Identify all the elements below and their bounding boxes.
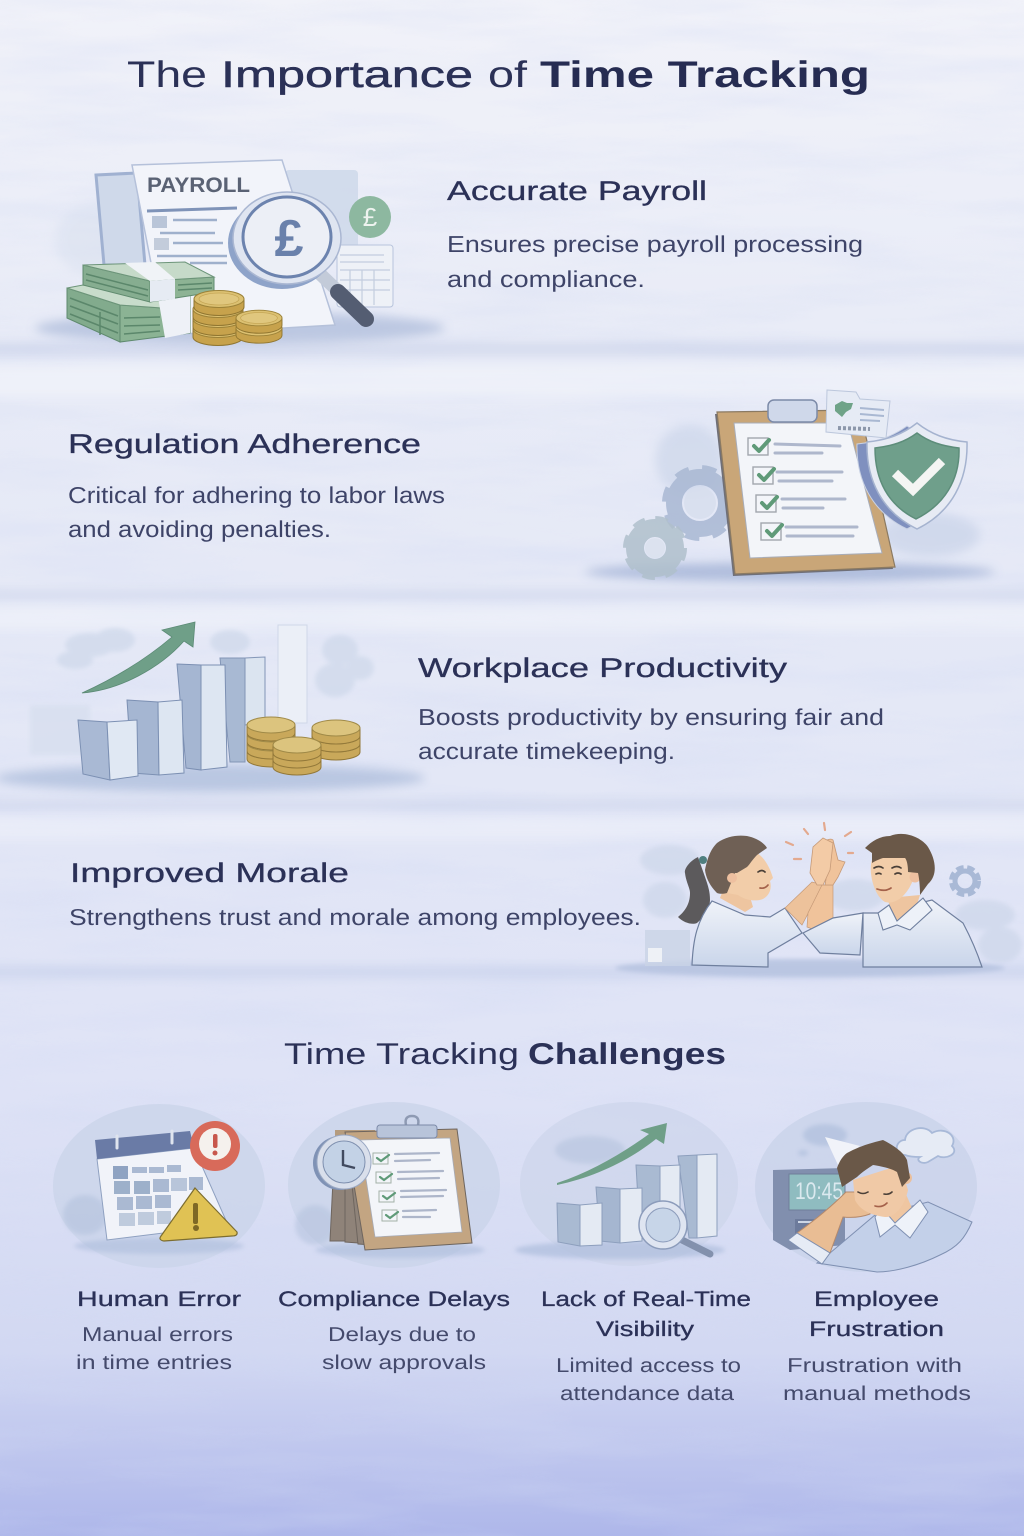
description [783, 1355, 971, 1405]
heading: Improved Morale [70, 858, 349, 888]
card: human error [53, 1104, 265, 1374]
description: and avoiding penalties. [68, 516, 331, 542]
description: Critical for adhering to labor laws [68, 482, 445, 508]
id card [826, 390, 890, 438]
heading: Accurate Payroll [447, 176, 707, 206]
icon: thought cloud [825, 1128, 954, 1165]
panel: regulation adherence [68, 390, 995, 582]
description [76, 1324, 233, 1374]
faded bar [278, 625, 307, 723]
bar 2 [127, 700, 184, 775]
description: and compliance. [447, 266, 645, 292]
description: slow approvals [322, 1352, 486, 1374]
description: Frustration with [787, 1355, 962, 1377]
description: manual methods [783, 1383, 971, 1405]
illustration: bar chart with arrow and coins [0, 622, 425, 792]
description: Strengthens trust and morale among employees. [69, 904, 641, 930]
icon: magnifying glass: £ [275, 210, 304, 268]
heading: Employee [814, 1288, 939, 1311]
sparkle rays [786, 823, 853, 859]
description [447, 231, 863, 292]
card: compliance delays [278, 1102, 510, 1374]
bundles of cash [67, 262, 214, 342]
bar 2 [596, 1187, 642, 1243]
bar 3 [636, 1165, 680, 1235]
heading: Workplace Productivity [418, 653, 788, 683]
illustration: clock and clipboards [288, 1102, 500, 1268]
stacks of gold coins [247, 717, 360, 775]
calendar card [337, 245, 393, 307]
icon: wall clock [313, 1135, 371, 1190]
time clock terminal: 10:45 [795, 1178, 843, 1205]
heading: Compliance Delays [278, 1288, 510, 1311]
time clock terminal [773, 1168, 845, 1250]
heading: Frustration [809, 1318, 944, 1341]
arrow: rising trend [82, 622, 195, 693]
stacks of gold coins [193, 290, 282, 346]
panel: workplace productivity [0, 622, 884, 792]
title: Importance [221, 54, 473, 95]
bar 1 [78, 720, 138, 780]
description [418, 704, 884, 764]
heading [541, 1288, 751, 1341]
description [322, 1324, 486, 1374]
description: Delays due to [328, 1324, 476, 1346]
illustration: bar chart with magnifier [515, 1102, 738, 1266]
description: Ensures precise payroll processing [447, 231, 863, 257]
icon: red alert badge [190, 1121, 240, 1171]
description [556, 1355, 741, 1405]
illustration: calendar with warnings [53, 1104, 265, 1268]
icon: gear [952, 868, 978, 894]
description: Limited access to [556, 1355, 741, 1377]
description: Manual errors [82, 1324, 233, 1346]
title: of [488, 54, 528, 95]
icon: green pound coin: £ [363, 202, 378, 232]
icon: magnifying glass [228, 192, 366, 319]
title [127, 54, 870, 95]
description: in time entries [76, 1352, 232, 1374]
woman [678, 836, 802, 967]
card: lack of real-time visibility [515, 1102, 751, 1405]
section heading: challenges: Time Tracking [284, 1038, 519, 1071]
description [68, 482, 445, 542]
description: accurate timekeeping. [418, 738, 675, 764]
icon: shield with check [857, 423, 967, 529]
illustration: two colleagues high-fiving [615, 823, 1022, 977]
illustration: frustrated employee at time clock [755, 1102, 977, 1272]
illustration: payroll document with magnifier, cash and coins: PAYROLL [147, 174, 250, 197]
high-five arms and hands [785, 838, 863, 955]
illustration: clipboard, shield and gears [585, 390, 995, 582]
title: Time Tracking [540, 54, 870, 95]
arrow: rising trend [557, 1123, 667, 1185]
icon: warning triangle [160, 1188, 237, 1241]
bar 1 [557, 1203, 602, 1246]
title: The [127, 54, 207, 95]
icon: large gear [666, 469, 734, 537]
panel: improved morale [69, 823, 1022, 977]
heading: Human Error [77, 1288, 241, 1311]
heading: Visibility [596, 1318, 695, 1341]
bar 3 [177, 664, 227, 770]
section heading: challenges: Challenges [528, 1038, 726, 1071]
card: employee frustration [755, 1102, 977, 1405]
description: Boosts productivity by ensuring fair and [418, 704, 884, 730]
heading: Regulation Adherence [68, 429, 421, 459]
clipboard [715, 400, 895, 576]
icon: magnifier [639, 1201, 710, 1254]
heading [809, 1288, 944, 1341]
man with hand on head [788, 1140, 972, 1272]
illustration: payroll document with magnifier, cash and coins [35, 160, 445, 346]
bar 4 [678, 1154, 717, 1238]
heading: Lack of Real-Time [541, 1288, 751, 1311]
icon: green pound coin [349, 196, 391, 238]
section heading: challenges [284, 1038, 726, 1071]
bar 4 [220, 657, 265, 762]
description: attendance data [560, 1383, 735, 1405]
icon: small gear [627, 520, 683, 576]
panel: accurate payroll [35, 160, 863, 346]
man [863, 834, 982, 967]
